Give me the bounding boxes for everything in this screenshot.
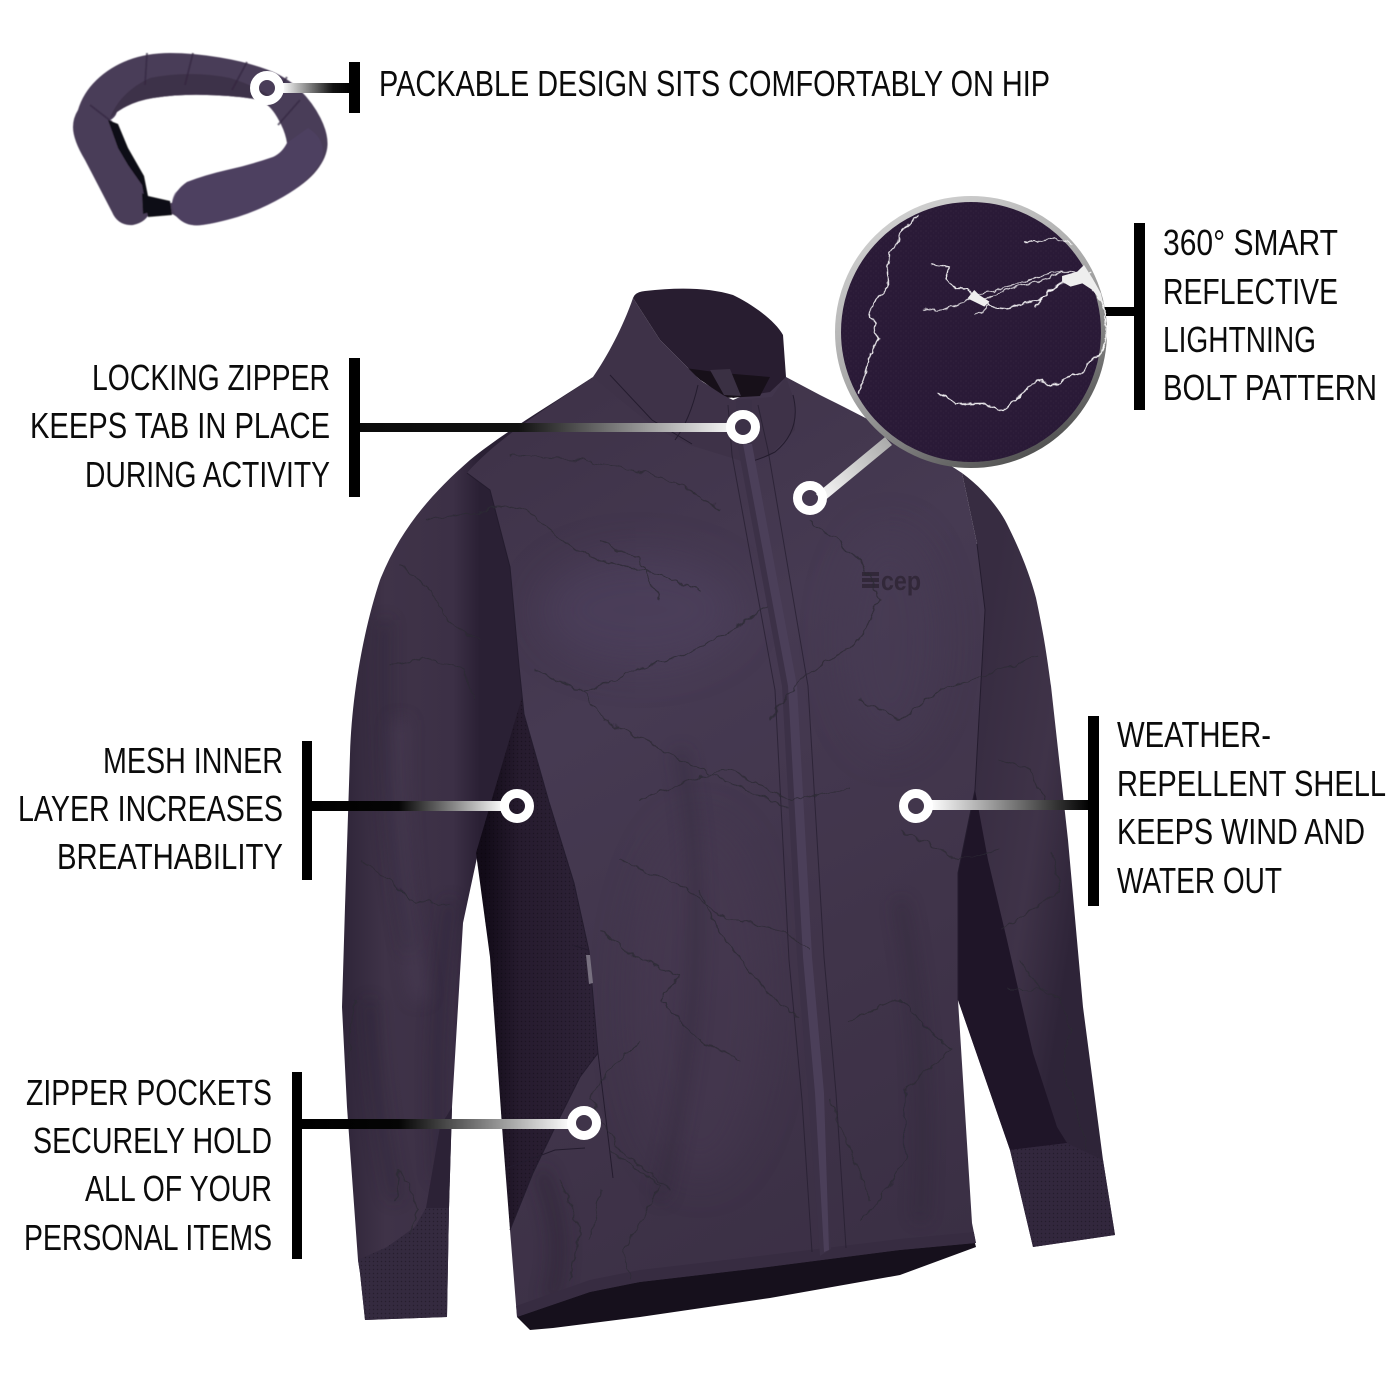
reflective lightning pattern bbox=[348, 455, 1085, 1280]
marker ring bbox=[254, 76, 280, 100]
collar front bbox=[593, 298, 795, 462]
label: 360° SMART bbox=[1163, 222, 1338, 263]
callout: zipper pockets bbox=[24, 1072, 596, 1259]
chest logo: cep bbox=[881, 566, 921, 596]
label: MESH INNER bbox=[103, 740, 283, 781]
callout: packable design bbox=[254, 62, 1050, 113]
pouch strap bbox=[108, 120, 172, 217]
left sleeve folds bbox=[370, 620, 450, 1200]
label: WATER OUT bbox=[1117, 860, 1282, 901]
packable jacket pouch bbox=[73, 53, 328, 225]
seams bbox=[467, 473, 985, 1230]
label bbox=[24, 1072, 272, 1258]
left side mesh panel bbox=[476, 690, 608, 1230]
leader line bbox=[303, 801, 508, 811]
jacket lining bbox=[517, 1225, 976, 1330]
label: DURING ACTIVITY bbox=[85, 454, 330, 495]
body shading bbox=[516, 530, 976, 1317]
label: LIGHTNING bbox=[1163, 319, 1316, 360]
label bbox=[30, 357, 330, 495]
collar back lining bbox=[633, 289, 786, 398]
callout: locking zipper bbox=[30, 357, 756, 497]
callout: reflective lightning magnifier bbox=[798, 199, 1377, 510]
right cuff bbox=[1010, 1143, 1115, 1247]
label: REFLECTIVE bbox=[1163, 271, 1338, 312]
label: PACKABLE DESIGN SITS COMFORTABLY ON HIP bbox=[379, 63, 1050, 104]
label: LAYER INCREASES bbox=[18, 788, 283, 829]
leader line bbox=[1102, 307, 1137, 316]
end bar bbox=[349, 62, 360, 113]
front zipper bbox=[728, 400, 846, 1256]
label: LOCKING ZIPPER bbox=[92, 357, 330, 398]
jacket front body bbox=[467, 377, 985, 1317]
label bbox=[1117, 714, 1386, 901]
pocket zipper pull bbox=[586, 955, 593, 984]
marker ring bbox=[904, 794, 928, 818]
label: WEATHER- bbox=[1117, 714, 1271, 755]
label bbox=[1163, 222, 1377, 408]
label: PERSONAL ITEMS bbox=[24, 1217, 272, 1258]
label: KEEPS TAB IN PLACE bbox=[30, 405, 330, 446]
end bar bbox=[1088, 716, 1099, 906]
right side mesh panel bbox=[958, 790, 1067, 1150]
label bbox=[18, 740, 283, 877]
right sleeve bbox=[958, 473, 1115, 1247]
marker ring bbox=[730, 414, 756, 440]
marker ring bbox=[504, 794, 530, 818]
leader line bbox=[282, 83, 352, 93]
leader line bbox=[351, 423, 733, 432]
callout: weather-repellent shell bbox=[904, 714, 1386, 906]
left cuff bbox=[358, 1208, 449, 1320]
lightning detail bbox=[858, 215, 1106, 411]
label: ALL OF YOUR bbox=[85, 1168, 272, 1209]
end bar bbox=[302, 741, 312, 880]
end bar bbox=[1134, 223, 1145, 410]
marker ring bbox=[798, 486, 822, 510]
end bar bbox=[292, 1072, 302, 1259]
leader line bbox=[293, 1119, 575, 1129]
callout: mesh inner layer bbox=[18, 740, 530, 880]
jacket bbox=[342, 289, 1115, 1330]
magnifier circle bbox=[838, 199, 1104, 465]
label: ZIPPER POCKETS bbox=[26, 1072, 272, 1113]
left sleeve bbox=[342, 377, 593, 1320]
end bar bbox=[349, 358, 360, 497]
chest logo bbox=[862, 566, 921, 596]
connector to marker bbox=[816, 437, 892, 502]
label: SECURELY HOLD bbox=[33, 1120, 272, 1161]
leader line bbox=[926, 800, 1090, 810]
label: BREATHABILITY bbox=[57, 836, 283, 877]
marker ring bbox=[572, 1110, 596, 1136]
